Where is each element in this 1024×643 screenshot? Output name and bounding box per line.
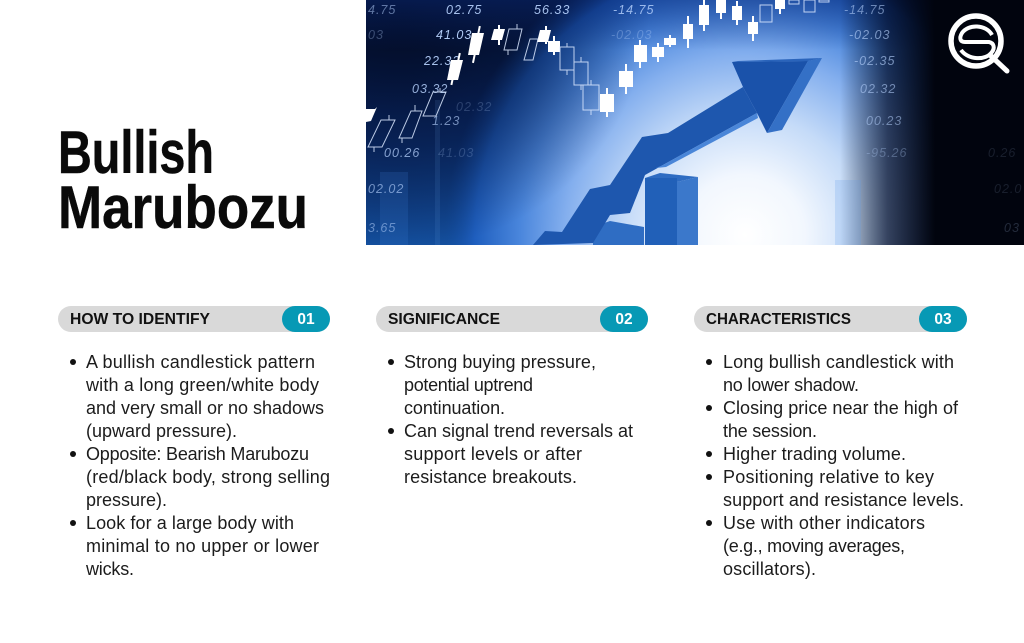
faint price numbers: 4.75 [368, 3, 396, 17]
faint price numbers: -02.03 [849, 28, 890, 42]
bullet list: Long bullish candlestick with [723, 352, 954, 372]
bullet list: with a long green/white body [85, 375, 319, 395]
title: Bullish [58, 119, 214, 186]
faint price numbers: 41.03 [438, 146, 474, 160]
bullet list: Strong buying pressure, [404, 352, 596, 372]
bullet list: (upward pressure). [86, 421, 237, 441]
bullet list: Use with other indicators [723, 513, 925, 533]
heading pill 03: 03 [934, 311, 952, 328]
bullet list: continuation. [404, 398, 505, 418]
faint price numbers: 02.32 [456, 100, 492, 114]
bullet list: A bullish candlestick pattern [86, 352, 315, 372]
candlesticks: hollow [368, 0, 829, 152]
bullet list: oscillators). [723, 559, 816, 579]
chart bars [593, 173, 698, 245]
bullet list: Look for a large body with [86, 513, 294, 533]
faint price numbers: 02.0 [994, 182, 1022, 196]
faint price numbers: 22.32 [423, 54, 460, 68]
faint price numbers: -14.75 [844, 3, 885, 17]
bullet list: support levels or after [404, 444, 582, 464]
faint price numbers: 3.65 [368, 221, 396, 235]
faint price numbers: 41.03 [436, 28, 472, 42]
heading pill 01 [58, 306, 330, 332]
bullet list: potential uptrend [404, 375, 533, 395]
rising arrow [533, 58, 822, 245]
bullet list: no lower shadow. [723, 375, 859, 395]
faint price numbers [368, 3, 1022, 235]
faint price numbers: 02.75 [446, 3, 482, 17]
bullet list: pressure). [86, 490, 167, 510]
bullet list: resistance breakouts. [404, 467, 577, 487]
hero image: stock chart with rising arrow [366, 0, 1024, 245]
faint price numbers: 56.33 [534, 3, 570, 17]
heading pill 01: 01 [297, 311, 315, 328]
faint price numbers: 03.32 [412, 82, 448, 96]
faint price numbers: 02.32 [860, 82, 896, 96]
faint price numbers: 00.23 [866, 114, 902, 128]
bullet list: and very small or no shadows [86, 398, 324, 418]
faint price numbers: -95.26 [866, 146, 907, 160]
faint price numbers: 03 [368, 28, 384, 42]
faint price numbers: 03 [1004, 221, 1020, 235]
bullet list [70, 352, 330, 579]
panel: characteristics [694, 306, 967, 579]
heading pill 02 [376, 306, 648, 332]
heading pill 02: 02 [615, 311, 633, 328]
heading pill 02: SIGNIFICANCE [388, 311, 500, 328]
faint price numbers: 00.26 [384, 146, 420, 160]
bullet list: Higher trading volume. [723, 444, 906, 464]
panel: how to identify [58, 306, 330, 579]
title: Marubozu [58, 174, 308, 241]
title [58, 119, 308, 241]
faint price numbers: 1.23 [432, 114, 460, 128]
bullet list: Closing price near the high of [723, 398, 959, 418]
bullet list [706, 352, 964, 579]
bullet list: minimal to no upper or lower [86, 536, 319, 556]
bullet list: (red/black body, strong selling [86, 467, 330, 487]
bullet list: the session. [723, 421, 817, 441]
faint price numbers: -14.75 [613, 3, 654, 17]
faint price numbers: -02.03 [611, 28, 652, 42]
heading pill 03: CHARACTERISTICS [706, 311, 851, 328]
faint price numbers: 0.26 [988, 146, 1016, 160]
heading pill 03 [694, 306, 967, 332]
bullet list: Opposite: Bearish Marubozu [86, 444, 309, 464]
faint price numbers: 02.02 [368, 182, 404, 196]
panel: significance [376, 306, 648, 487]
bullet list [388, 352, 633, 487]
heading pill 01: HOW TO IDENTIFY [70, 311, 211, 328]
bullet list: Can signal trend reversals at [404, 421, 633, 441]
faint price numbers: -02.35 [854, 54, 895, 68]
logo [951, 16, 1007, 71]
candlesticks: filled [366, 0, 785, 122]
bullet list: Positioning relative to key [723, 467, 934, 487]
bullet list: support and resistance levels. [723, 490, 964, 510]
bullet list: wicks. [85, 559, 134, 579]
bullet list: (e.g., moving averages, [723, 536, 905, 556]
